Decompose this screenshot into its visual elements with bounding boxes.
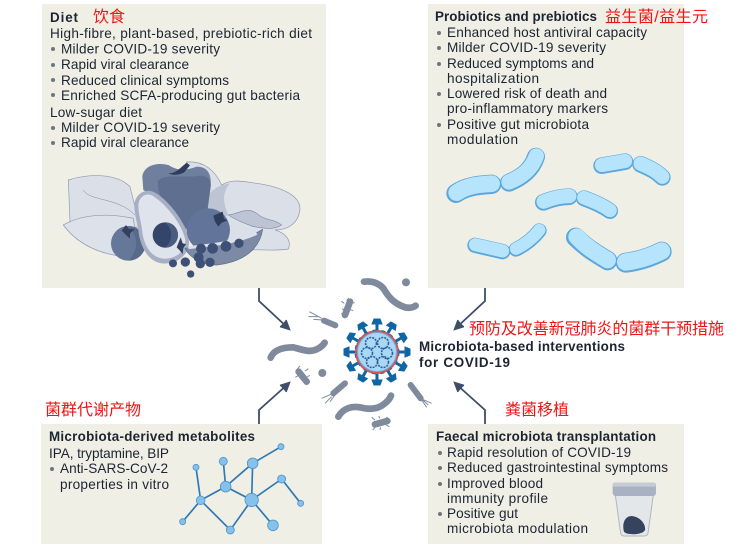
arrow: diet to centre [259, 288, 290, 330]
label: central Chinese title: 预防及改善新冠肺炎的菌群干预措施 [469, 320, 724, 338]
panel: microbiota-derived metabolites [41, 424, 322, 544]
text block: FMT benefits: Reduced gastrointestinal symptoms [447, 460, 668, 475]
arrow: FMT to centre [454, 382, 485, 424]
text block: diet benefits: Low-sugar diet [50, 105, 142, 120]
heading: probiotics Chinese: 益生菌/益生元 [605, 8, 708, 26]
text block: diet benefits: Milder COVID-19 severity [61, 120, 220, 135]
icon: healthy food illustration [63, 162, 300, 278]
heading: FMT: Faecal microbiota transplantation [436, 429, 656, 444]
heading: diet: Diet [50, 10, 79, 25]
text block: probiotic benefits: modulation [447, 132, 518, 147]
text block: metabolites: properties in vitro [60, 477, 169, 492]
text block: FMT benefits: Rapid resolution of COVID-19 [447, 445, 631, 460]
heading: central title: Microbiota-based interventions [419, 339, 625, 354]
icon: stool sample cup [613, 483, 656, 536]
text block: diet benefits: Reduced clinical symptoms [61, 73, 229, 88]
heading: probiotics: Probiotics and prebiotics [435, 9, 597, 24]
text block: probiotic benefits: Milder COVID-19 severity [447, 40, 606, 55]
icon: gut microbes [271, 278, 432, 430]
text block: metabolites [49, 446, 169, 492]
heading: central title: for COVID-19 [419, 355, 510, 370]
text block: FMT benefits: Improved blood [447, 476, 543, 491]
RNA strand [362, 338, 392, 368]
heading: metabolites: Microbiota-derived metabolites [49, 429, 255, 444]
text block: diet benefits [50, 26, 312, 150]
text block: probiotic benefits: Lowered risk of death and [447, 86, 607, 101]
heading: diet Chinese: 饮食 [93, 8, 125, 26]
panel: probiotics and prebiotics [428, 4, 708, 288]
text block: diet benefits: Rapid viral clearance [61, 57, 189, 72]
text block: probiotic benefits [437, 25, 647, 147]
text block: diet benefits: High-fibre, plant-based, prebiotic-rich diet [50, 26, 312, 41]
arrow: metabolites to centre [259, 382, 290, 424]
text block: FMT benefits: immunity profile [447, 491, 548, 506]
text block: diet benefits: Enriched SCFA-producing gut bacteria [61, 88, 300, 103]
icon: probiotic bacteria [456, 156, 662, 263]
text block: metabolites: IPA, tryptamine, BIP [49, 446, 169, 461]
text block: FMT benefits: microbiota modulation [447, 521, 588, 536]
text block: probiotic benefits: hospitalization [447, 71, 539, 86]
text block: probiotic benefits: Enhanced host antiviral capacity [447, 25, 647, 40]
text block: FMT benefits: Positive gut [447, 506, 518, 521]
text block: diet benefits: Rapid viral clearance [61, 135, 189, 150]
icon: coronavirus [344, 319, 410, 385]
text block: probiotic benefits: Reduced symptoms and [447, 56, 594, 71]
panel: faecal microbiota transplantation [428, 424, 684, 544]
text block: probiotic benefits: pro-inflammatory markers [447, 101, 608, 116]
text block: probiotic benefits: Positive gut microbiota [447, 117, 589, 132]
heading: central title [419, 339, 625, 370]
text block: diet benefits: Milder COVID-19 severity [61, 42, 220, 56]
label: FMT Chinese: 粪菌移植 [505, 401, 569, 419]
text block: FMT benefits [438, 445, 668, 536]
arrow: probiotics to centre [454, 288, 485, 330]
text block: metabolites: Anti-SARS-CoV-2 [60, 461, 168, 476]
label: metabolites Chinese: 菌群代谢产物 [45, 401, 141, 419]
icon: metabolite network [180, 444, 304, 534]
panel: diet [42, 4, 326, 288]
